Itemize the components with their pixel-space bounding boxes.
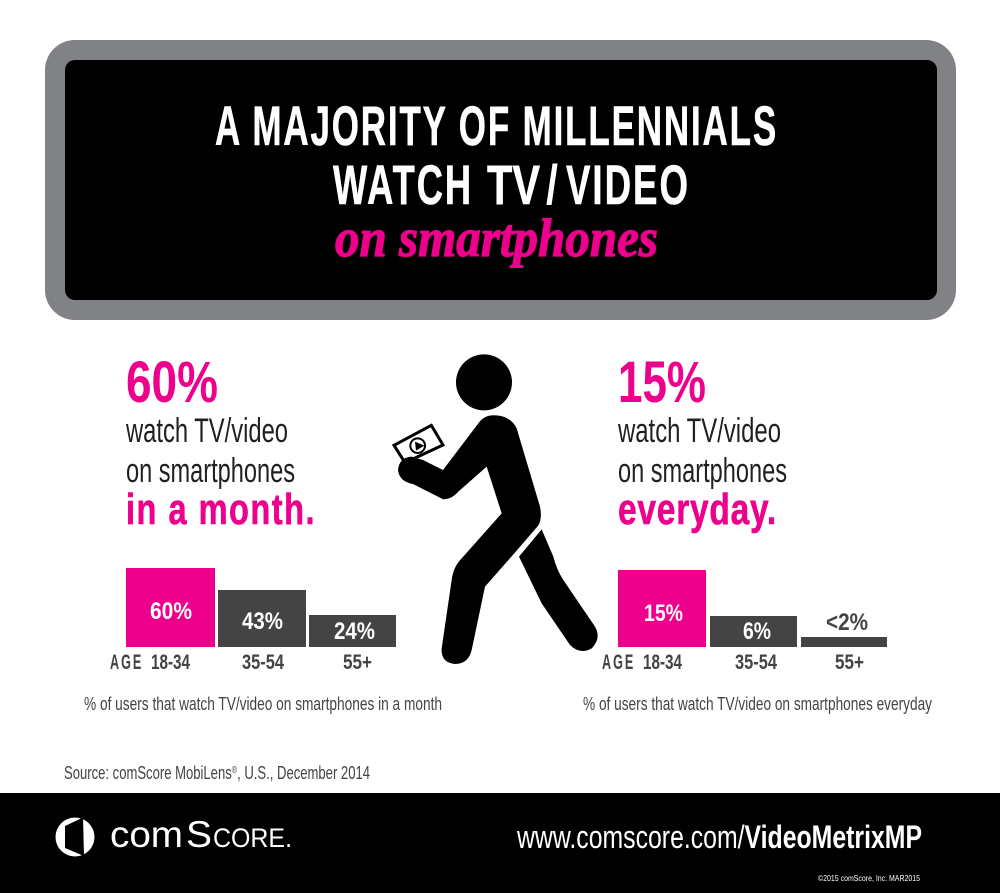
title: TV (487, 153, 540, 216)
panel: everyday stat text (617, 350, 787, 534)
panel: title banner (45, 40, 956, 320)
panel: everyday stat text: on smartphones (618, 452, 787, 490)
bar chart: everyday by age: <2% (826, 609, 868, 636)
bar chart: everyday by age: 15% (644, 600, 683, 627)
subtitle: on smartphones: on smartphones (335, 208, 658, 268)
website url: www.comscore.com/VideoMetrixMP (516, 819, 922, 855)
title: WATCH (333, 153, 473, 216)
title: / (546, 153, 558, 216)
bar chart: monthly by age: 18-34 (151, 651, 190, 674)
bar chart: everyday by age: 55+ (835, 651, 864, 674)
panel: monthly stat text: on smartphones (126, 452, 295, 490)
copyright: ©2015 comScore, Inc. MAR2015 (818, 874, 920, 883)
logo wordmark: S (186, 814, 212, 855)
logo wordmark: com (110, 814, 183, 855)
bar chart: monthly by age: 24% (334, 618, 375, 645)
logo wordmark (110, 814, 292, 855)
panel: monthly stat text (125, 350, 316, 534)
bar chart: monthly by age: 35-54 (242, 651, 284, 674)
logo wordmark: CORE. (213, 823, 292, 853)
source note: , U.S., December 2014 (237, 763, 370, 783)
bar chart: monthly by age (110, 568, 396, 674)
panel: everyday stat text: 15% (618, 350, 706, 415)
icon: comScore logo (56, 818, 94, 856)
panel: monthly stat text: 60% (126, 350, 218, 415)
bar chart: monthly by age: 43% (242, 608, 283, 635)
source note: Source: comScore MobiLens (64, 763, 295, 783)
source note: ® (232, 765, 238, 776)
icon: person walking with smartphone (394, 354, 598, 664)
title (215, 94, 778, 216)
bar chart: monthly by age: 55+ (343, 651, 372, 674)
bar chart: everyday by age (602, 570, 887, 674)
bar chart: everyday by age: 6% (743, 618, 771, 645)
bar chart: everyday by age: 35-54 (735, 651, 777, 674)
bar chart: monthly by age: 60% (150, 598, 192, 625)
panel: monthly stat text: in a month. (126, 485, 316, 534)
bar chart: everyday by age: AGE (602, 650, 635, 674)
panel: everyday stat text: watch TV/video (617, 412, 781, 450)
panel: monthly stat text: watch TV/video (125, 412, 288, 450)
bar chart: everyday by age: 18-34 (643, 651, 682, 674)
caption: monthly chart: % of users that watch TV/video on smartphones in a month (84, 694, 442, 714)
title: VIDEO (566, 153, 690, 216)
bar chart: monthly by age: AGE (110, 650, 143, 674)
panel: everyday stat text: everyday. (618, 485, 777, 534)
panel: footer (0, 793, 1000, 893)
